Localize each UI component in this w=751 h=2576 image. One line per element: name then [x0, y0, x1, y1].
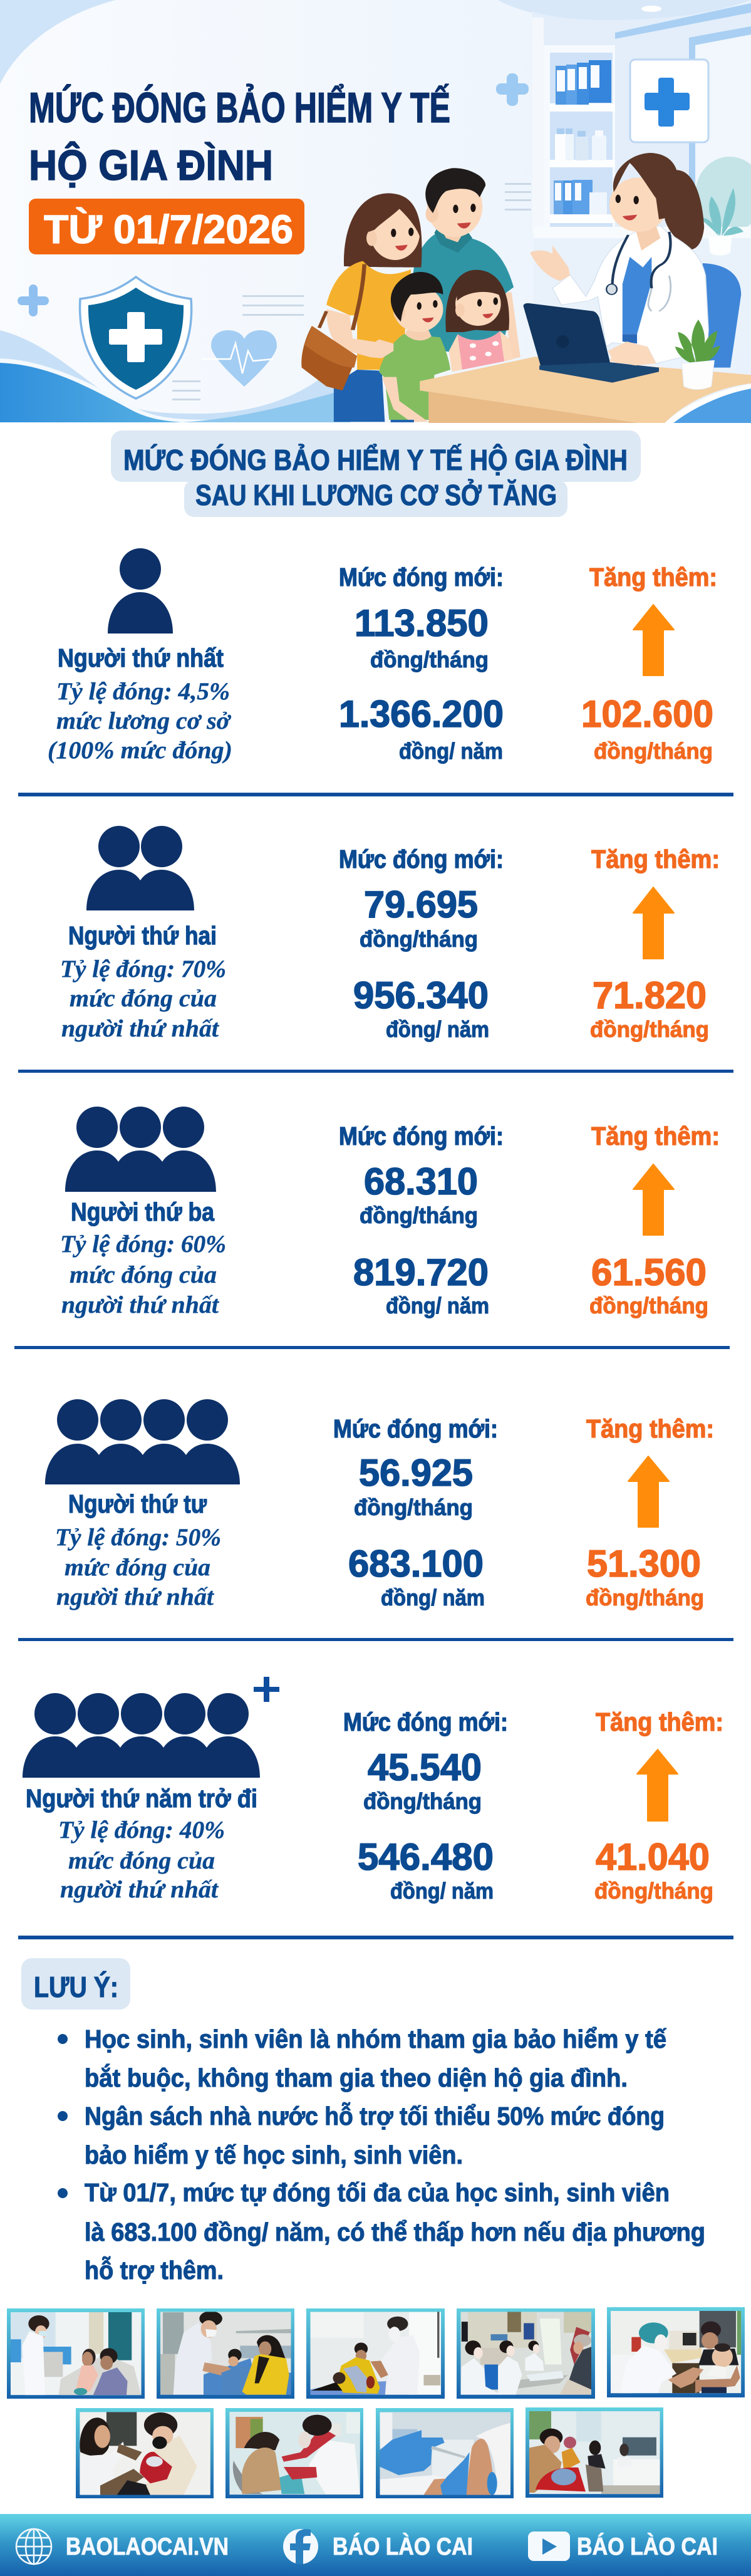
- note 2: Ngân sách nhà nước hỗ trợ tối thiểu 50% mức đóng: [85, 2102, 665, 2130]
- contribution rate: [48, 678, 232, 764]
- contribution rate: [58, 1817, 225, 1903]
- date badge: TỪ 01/7/2026: [44, 207, 293, 252]
- new contribution: 113.850: [355, 602, 489, 644]
- note 1: bắt buộc, không tham gia theo diện hộ gia đình.: [85, 2063, 628, 2092]
- photo 7: [225, 2408, 363, 2498]
- increase: đồng/tháng: [589, 1293, 708, 1318]
- note heading: [21, 1958, 130, 2010]
- new contribution: 79.695: [364, 884, 478, 926]
- note 3: hỗ trợ thêm.: [85, 2256, 224, 2285]
- laptop: [523, 303, 659, 383]
- arrow up: [633, 887, 674, 959]
- photo 6: [76, 2408, 214, 2498]
- new contribution: đồng/ năm: [399, 738, 503, 764]
- photo 2: [157, 2308, 294, 2399]
- icon: four people: [45, 1399, 240, 1484]
- photo gallery: [7, 2307, 745, 2498]
- contribution rate: người thứ nhất: [61, 1291, 219, 1318]
- increase: đồng/tháng: [594, 738, 713, 764]
- label: người thứ hai: Người thứ hai: [68, 921, 217, 950]
- family and doctor: [301, 153, 751, 423]
- panel: người thứ tư: [45, 1399, 714, 1610]
- icon: globe: [16, 2529, 51, 2564]
- increase: đồng/tháng: [586, 1585, 704, 1610]
- new contribution: đồng/tháng: [360, 926, 478, 952]
- panel: người thứ hai: [60, 826, 720, 1042]
- contribution rate: mức đóng của: [68, 1847, 215, 1874]
- increase: 51.300: [587, 1543, 701, 1585]
- new contribution: 956.340: [353, 974, 489, 1016]
- note heading: LƯU Ý:: [34, 1971, 118, 2003]
- photo 4: [457, 2308, 595, 2399]
- binders: [556, 60, 611, 105]
- contribution rate: mức lương cơ sở: [56, 707, 231, 734]
- new contribution: 683.100: [348, 1543, 484, 1585]
- father: [405, 168, 521, 359]
- boy: [369, 272, 450, 422]
- icon: two people: [86, 826, 194, 910]
- photo 8: [376, 2408, 514, 2498]
- girl: [445, 270, 513, 372]
- label: người thứ năm trở đi: Người thứ năm trở đi: [26, 1784, 257, 1813]
- panel: người thứ năm trở đi: [23, 1677, 723, 1904]
- icon: small plus left: [18, 284, 49, 316]
- plant: [675, 320, 720, 390]
- new contribution: đồng/ năm: [381, 1585, 485, 1610]
- new contribution: Mức đóng mới:: [343, 1708, 508, 1736]
- contribution rate: mức đóng của: [70, 1261, 217, 1288]
- contribution rate: [60, 956, 226, 1042]
- photo 5: [607, 2307, 745, 2397]
- icon: heart with pulse: [202, 330, 277, 387]
- new contribution: đồng/ năm: [386, 1293, 489, 1318]
- bottom wave: [0, 330, 351, 422]
- increase: [586, 1414, 714, 1610]
- new contribution: đồng/ năm: [390, 1878, 494, 1904]
- contribution rate: người thứ nhất: [60, 1876, 219, 1903]
- new contribution: Mức đóng mới:: [339, 1122, 504, 1150]
- website: BAOLAOCAI.VN: [66, 2533, 229, 2560]
- increase: Tăng thêm:: [589, 563, 717, 592]
- new contribution: đồng/tháng: [363, 1788, 482, 1814]
- contribution rate: Tỷ lệ đóng: 40%: [58, 1817, 225, 1843]
- desk: [420, 357, 751, 423]
- label: người thứ tư: Người thứ tư: [68, 1489, 207, 1518]
- icon: five people plus: [23, 1677, 279, 1778]
- contribution rate: Tỷ lệ đóng: 70%: [60, 956, 226, 983]
- chair: [703, 263, 741, 368]
- increase: [590, 845, 720, 1042]
- panel: người thứ ba: [60, 1107, 720, 1318]
- contribution rate: người thứ nhất: [56, 1583, 214, 1610]
- doctor: [530, 153, 708, 363]
- contribution rate: [60, 1231, 226, 1318]
- increase: Tăng thêm:: [586, 1414, 714, 1443]
- new contribution: Mức đóng mới:: [333, 1414, 498, 1443]
- section heading: MỨC ĐÓNG BẢO HIỂM Y TẾ HỘ GIA ĐÌNH: [123, 444, 628, 476]
- increase: [594, 1708, 723, 1904]
- new contribution: 1.366.200: [339, 693, 504, 735]
- background corner curve: [0, 0, 116, 84]
- increase: 102.600: [581, 693, 713, 735]
- contribution rate: Tỷ lệ đóng: 4,5%: [56, 678, 230, 705]
- increase: 61.560: [591, 1251, 707, 1293]
- icon: shield: [80, 277, 192, 399]
- new contribution: [339, 563, 504, 764]
- new contribution: Mức đóng mới:: [339, 845, 504, 873]
- increase: 71.820: [593, 974, 707, 1016]
- icon: three people: [65, 1107, 216, 1192]
- icon: medical sign: [630, 60, 708, 142]
- new contribution: [339, 1122, 504, 1318]
- mother: [301, 193, 422, 422]
- note 3: là 683.100 đồng/ năm, có thể thấp hơn nếu địa phương: [85, 2218, 705, 2246]
- note 3: Từ 01/7, mức tự đóng tối đa của học sinh, sinh viên: [85, 2178, 670, 2207]
- new contribution: [333, 1414, 498, 1610]
- increase: [589, 1122, 720, 1318]
- arrow up: [633, 1164, 674, 1235]
- contribution rate: mức đóng của: [65, 1554, 210, 1581]
- clinic room: [498, 0, 751, 351]
- footer: [0, 2514, 751, 2576]
- contribution rate: người thứ nhất: [61, 1015, 219, 1042]
- increase: Tăng thêm:: [591, 1122, 720, 1150]
- new contribution: đồng/tháng: [354, 1494, 473, 1520]
- dots: [172, 183, 531, 400]
- title: HỘ GIA ĐÌNH: [29, 141, 273, 189]
- new contribution: [339, 845, 504, 1042]
- new contribution: 819.720: [353, 1251, 489, 1293]
- increase: [581, 563, 717, 764]
- increase: đồng/tháng: [594, 1878, 713, 1904]
- section heading: SAU KHI LƯƠNG CƠ SỞ TĂNG: [195, 479, 557, 511]
- note list: [58, 2025, 705, 2285]
- icon: one person: [108, 548, 173, 634]
- note 1: Học sinh, sinh viên là nhóm tham gia bảo hiểm y tế: [85, 2025, 666, 2053]
- youtube channel: BÁO LÀO CAI: [577, 2533, 718, 2560]
- photo 3: [306, 2308, 445, 2399]
- photo 1: [7, 2308, 145, 2399]
- label: người thứ nhất: Người thứ nhất: [58, 644, 224, 672]
- window plant: [700, 188, 743, 256]
- new contribution: Mức đóng mới:: [339, 563, 504, 592]
- arrow up: [633, 605, 674, 675]
- title: MỨC ĐÓNG BẢO HIỂM Y TẾ: [29, 83, 450, 132]
- new contribution: đồng/tháng: [360, 1202, 478, 1228]
- arrow up: [637, 1749, 678, 1821]
- title: [29, 83, 450, 189]
- new contribution: 68.310: [364, 1160, 478, 1202]
- note 1: [58, 2025, 666, 2092]
- new contribution: đồng/tháng: [370, 647, 489, 672]
- new contribution: 56.925: [359, 1452, 473, 1494]
- section heading: [111, 430, 641, 517]
- contribution rate: Tỷ lệ đóng: 60%: [60, 1231, 226, 1258]
- increase: đồng/tháng: [590, 1016, 709, 1042]
- hero banner illustration: [0, 0, 751, 423]
- note 2: bảo hiểm y tế học sinh, sinh viên.: [85, 2141, 463, 2169]
- contribution rate: mức đóng của: [70, 985, 217, 1012]
- icon: youtube: [528, 2532, 570, 2561]
- increase: Tăng thêm:: [596, 1708, 723, 1736]
- increase: Tăng thêm:: [591, 845, 720, 873]
- new contribution: 45.540: [368, 1746, 482, 1788]
- icon: facebook: [283, 2529, 318, 2564]
- note 2: [58, 2102, 665, 2169]
- lower shelf binders: [554, 180, 607, 214]
- label: người thứ ba: Người thứ ba: [71, 1197, 215, 1226]
- facebook page: BÁO LÀO CAI: [333, 2533, 473, 2560]
- panel: người thứ nhất: [48, 548, 717, 764]
- contribution rate: [55, 1524, 221, 1610]
- photo 9: [526, 2407, 663, 2498]
- arrow up: [628, 1456, 669, 1527]
- new contribution: 546.480: [358, 1836, 494, 1878]
- increase: 41.040: [596, 1836, 710, 1878]
- contribution rate: Tỷ lệ đóng: 50%: [55, 1524, 221, 1551]
- bottles: [555, 128, 606, 160]
- contribution rate: (100% mức đóng): [48, 737, 232, 764]
- new contribution: [343, 1708, 508, 1904]
- new contribution: đồng/ năm: [386, 1016, 489, 1042]
- icon: small plus: [496, 73, 529, 106]
- note 3: [58, 2178, 705, 2285]
